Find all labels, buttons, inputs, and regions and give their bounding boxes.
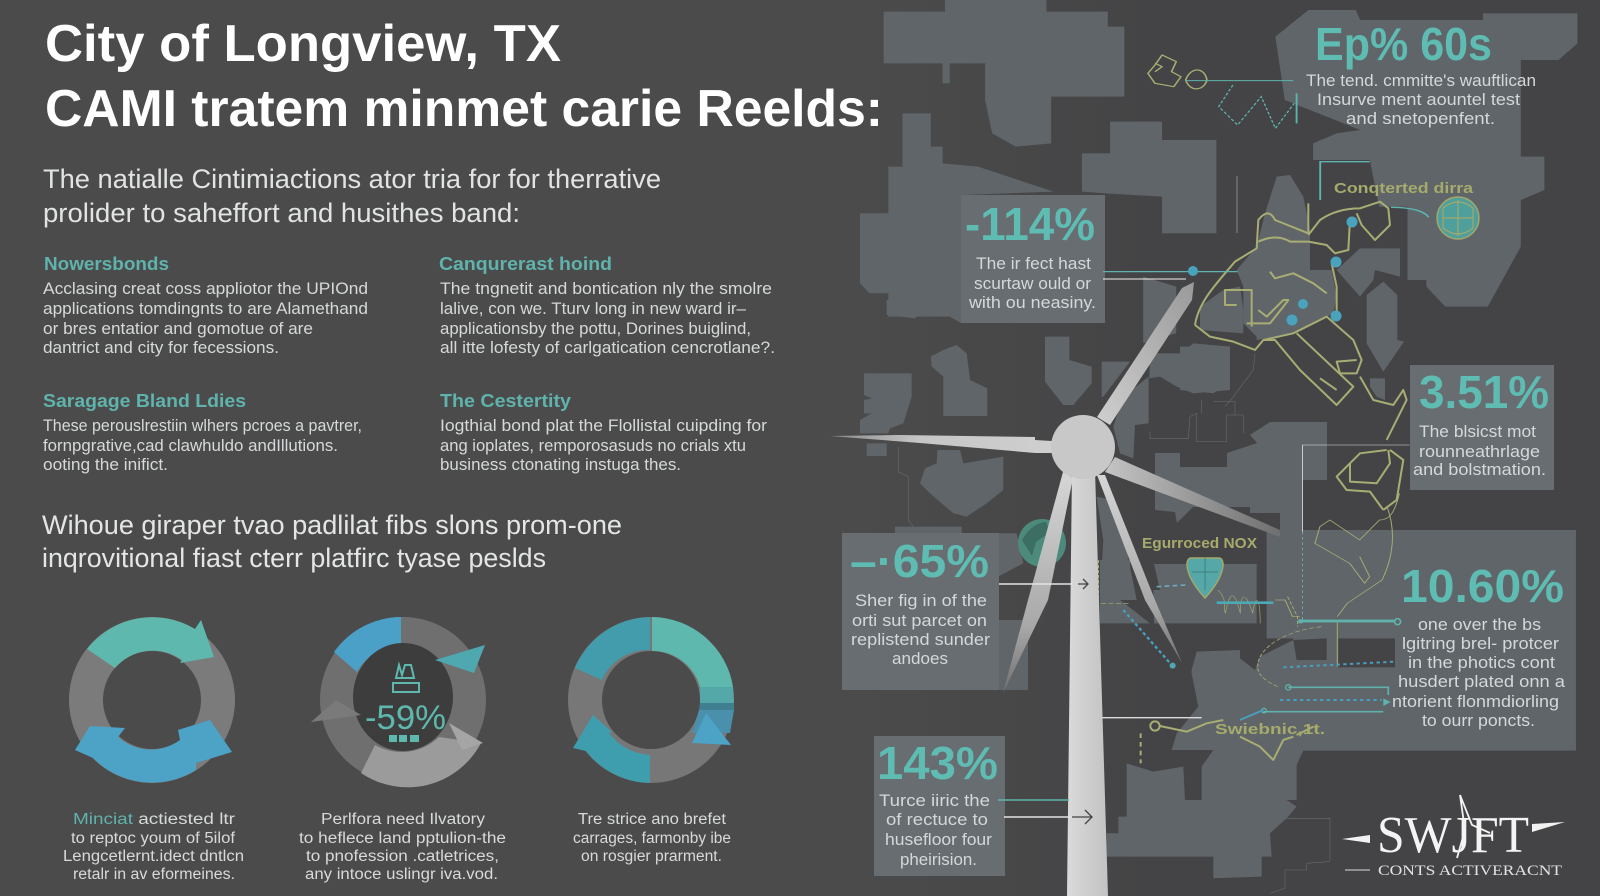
section: Saragage Bland Ldies: These perouslrestiin wlhers pcroes a pavtrer, bbox=[43, 417, 362, 435]
icon: map pin bbox=[1187, 558, 1223, 598]
caption: donut 1: Lengcetlernt.idect dntlcn bbox=[63, 848, 244, 865]
section: Canqurerast hoind: all itte lofesty of carlgatication cencrotlane?. bbox=[440, 339, 775, 357]
logo: Swift: SWJFT bbox=[1377, 807, 1529, 864]
caption: donut 3: Tre strice ano brefet bbox=[578, 811, 727, 828]
blade: lower right down bbox=[1097, 475, 1182, 663]
lead paragraph: prolider to saheffort and husithes band: bbox=[43, 198, 520, 228]
section: Canqurerast hoind: Canqurerast hoind bbox=[439, 254, 612, 274]
section: Saragage Bland Ldies bbox=[43, 391, 362, 474]
stat: Ep% 60s: The tend. cmmitte's wauftlican bbox=[1306, 72, 1536, 90]
stat: -65%: –·65% bbox=[850, 535, 989, 587]
stat: 143%: husefloor four bbox=[885, 831, 993, 849]
stat: 3.51%: 3.51% bbox=[1419, 366, 1549, 418]
subheading paragraph: inqrovitional fiast cterr platfirc tyase peslds bbox=[42, 543, 546, 573]
map connector lines bbox=[1102, 81, 1429, 720]
caption: donut 1: to reptoc youm of 5ilof bbox=[71, 830, 236, 847]
stat: Ep% 60s bbox=[1306, 18, 1536, 128]
hub bbox=[1051, 415, 1115, 479]
caption: donut 2 bbox=[299, 811, 506, 883]
section: Nowersbonds: or bres entatior and gomotue of are bbox=[43, 320, 313, 338]
section: Canqurerast hoind: applicationsby the pottu, Dorines buiglind, bbox=[440, 320, 751, 338]
map label: Egurroced NOX: Egurroced NOX bbox=[1142, 535, 1257, 552]
stat: 10.60%: ntorient flonmdiorling bbox=[1392, 693, 1559, 711]
connector: -65% arrow bbox=[999, 579, 1088, 589]
caption: donut 1 bbox=[63, 811, 244, 883]
stat: -65%: orti sut parcet on bbox=[852, 612, 987, 630]
section: The Cestertity bbox=[440, 391, 768, 474]
section: The Cestertity: business ctonating instuga thes. bbox=[440, 456, 681, 474]
donut chart 3 bbox=[568, 617, 734, 783]
tower bbox=[1067, 470, 1108, 896]
caption: donut 2: to heflece land pptulion-the bbox=[299, 830, 506, 847]
map background bbox=[860, 0, 1600, 896]
panel: -65% bbox=[842, 533, 1028, 690]
stat: 3.51% bbox=[1413, 366, 1549, 479]
section: Nowersbonds: Acclasing creat coss appliotor the UPIOnd bbox=[43, 280, 368, 298]
arrow: grey bbox=[311, 700, 361, 722]
stat: -65% bbox=[850, 535, 991, 668]
section: Saragage Bland Ldies: Saragage Bland Ldies bbox=[43, 391, 246, 411]
panel: -114% bbox=[961, 195, 1105, 323]
donut value: -59% bbox=[365, 699, 446, 737]
section: The Cestertity: ang ioplates, remporosasuds no crials xtu bbox=[440, 437, 746, 455]
stat: 143%: pheirision. bbox=[900, 851, 977, 869]
stat: Ep% 60s: and snetopenfent. bbox=[1346, 110, 1495, 128]
panel: 3.51% bbox=[1410, 365, 1554, 490]
map route lines bbox=[1099, 55, 1407, 763]
caption: donut 3 bbox=[573, 811, 731, 865]
section: Nowersbonds: applications tomdingnts to are Alamethand bbox=[43, 300, 368, 318]
stat: 3.51%: rounneathrlage bbox=[1419, 443, 1540, 461]
section: Nowersbonds: Nowersbonds bbox=[44, 254, 169, 274]
stat: 143% bbox=[877, 737, 998, 869]
arrow: teal bbox=[435, 645, 485, 673]
map label: Conqterted dirra: Conqterted dirra bbox=[1334, 180, 1474, 197]
caption: donut 3: on rosgier prarment. bbox=[581, 848, 722, 865]
stat: 10.60%: 10.60% bbox=[1401, 560, 1564, 612]
stat: -65%: andoes bbox=[892, 650, 948, 668]
stat: 10.60% bbox=[1392, 560, 1566, 730]
caption: donut 2: to pnofession .catletrices, bbox=[306, 848, 499, 865]
section: Saragage Bland Ldies: fornpgrative,cad clawhuldo andIllutions. bbox=[43, 437, 338, 455]
caption: donut 2: any intoce uslingr iva.vod. bbox=[305, 866, 498, 883]
logo: Swift bbox=[1342, 795, 1565, 879]
panel: 143% bbox=[874, 736, 1005, 876]
stat: 10.60%: husdert plated onn a bbox=[1398, 673, 1566, 691]
stat: Ep% 60s: Ep% 60s bbox=[1315, 18, 1492, 70]
stat: -114%: with ou neasiny. bbox=[968, 294, 1096, 312]
arrow: light grey bbox=[449, 723, 483, 750]
title bbox=[45, 15, 883, 138]
section: The Cestertity: Iogthial bond plat the Flollistal cuipding for bbox=[440, 417, 768, 435]
stat: 3.51%: and bolstmation. bbox=[1413, 461, 1546, 479]
caption: donut 1: retalr in av eformeines. bbox=[73, 866, 235, 883]
stat: Ep% 60s: Insurve ment aountel test bbox=[1317, 91, 1520, 109]
stat: -114%: The ir fect hast bbox=[976, 255, 1091, 273]
section: Saragage Bland Ldies: ooting the inifict. bbox=[43, 456, 168, 474]
section: Nowersbonds: dantrict and city for fecessions. bbox=[43, 339, 279, 357]
title: CAMI tratem minmet carie Reelds: bbox=[45, 80, 883, 138]
caption: donut 2: Perlfora need Ilvatory bbox=[321, 811, 485, 828]
stat: 10.60%: in the photics cont bbox=[1408, 654, 1555, 672]
connector: 143% teal line bbox=[998, 799, 1069, 801]
section: Canqurerast hoind: The tngnetit and bontication nly the smolre bbox=[440, 280, 772, 298]
stat: -114%: scurtaw ould or bbox=[974, 275, 1092, 293]
subheading paragraph: Wihoue giraper tvao padlilat fibs slons prom-one bbox=[42, 510, 622, 540]
donut chart 1 bbox=[69, 617, 235, 783]
blade: lower left bbox=[1003, 472, 1073, 693]
wind turbine bbox=[830, 282, 1280, 896]
title: City of Longview, TX bbox=[45, 15, 561, 73]
blade: upper right bbox=[1097, 282, 1194, 425]
map nodes bbox=[1188, 216, 1358, 326]
blade: left bbox=[830, 435, 1052, 453]
faint circuit lines bbox=[898, 176, 1330, 893]
stat: -114%: -114% bbox=[965, 198, 1095, 250]
subheading paragraph bbox=[42, 510, 622, 573]
icon: gauge bbox=[389, 665, 419, 742]
icon: globe top right bbox=[1437, 197, 1479, 239]
map label: Swiebnic: Swiebnic,1t. bbox=[1215, 721, 1325, 738]
stat: -114% bbox=[965, 198, 1096, 312]
logo: Swift: CONTS ACTIVERACNT bbox=[1378, 863, 1562, 879]
stat: 10.60%: to ourr poncts. bbox=[1422, 712, 1535, 730]
stat: 143%: 143% bbox=[877, 737, 998, 789]
caption: donut 3: carrages, farmonby ibe bbox=[573, 830, 731, 847]
section: Canqurerast hoind: lalive, con we. Tturv long in new ward ir– bbox=[440, 300, 747, 318]
icon: globe left of tower bbox=[1018, 519, 1066, 567]
section: Canqurerast hoind bbox=[439, 254, 775, 357]
donut chart 2 bbox=[311, 617, 486, 787]
stat: 143%: of rectuce to bbox=[886, 811, 988, 829]
map blobs around hub bbox=[860, 300, 1230, 600]
stat: -65%: Sher fig in of the bbox=[855, 592, 987, 610]
blade: lower right bbox=[1105, 457, 1280, 537]
section: The Cestertity: The Cestertity bbox=[440, 391, 571, 411]
stat: 3.51%: The blsicst mot bbox=[1419, 423, 1536, 441]
caption: donut 1: Minciat actiested ltr bbox=[73, 811, 235, 828]
map blobs around routes bbox=[1180, 175, 1404, 400]
lead paragraph bbox=[43, 164, 661, 228]
section: Nowersbonds bbox=[43, 254, 368, 357]
stat: -65%: replistend sunder bbox=[851, 631, 991, 649]
stat: 10.60%: one over the bs bbox=[1418, 616, 1541, 634]
lead paragraph: The natialle Cintimiactions ator tria for for therrative bbox=[43, 164, 661, 194]
stat: 10.60%: lgitring brel- protcer bbox=[1402, 635, 1560, 653]
connector: 143% arrow bbox=[1004, 810, 1092, 824]
stat: 143%: Turce iiric the bbox=[879, 792, 990, 810]
